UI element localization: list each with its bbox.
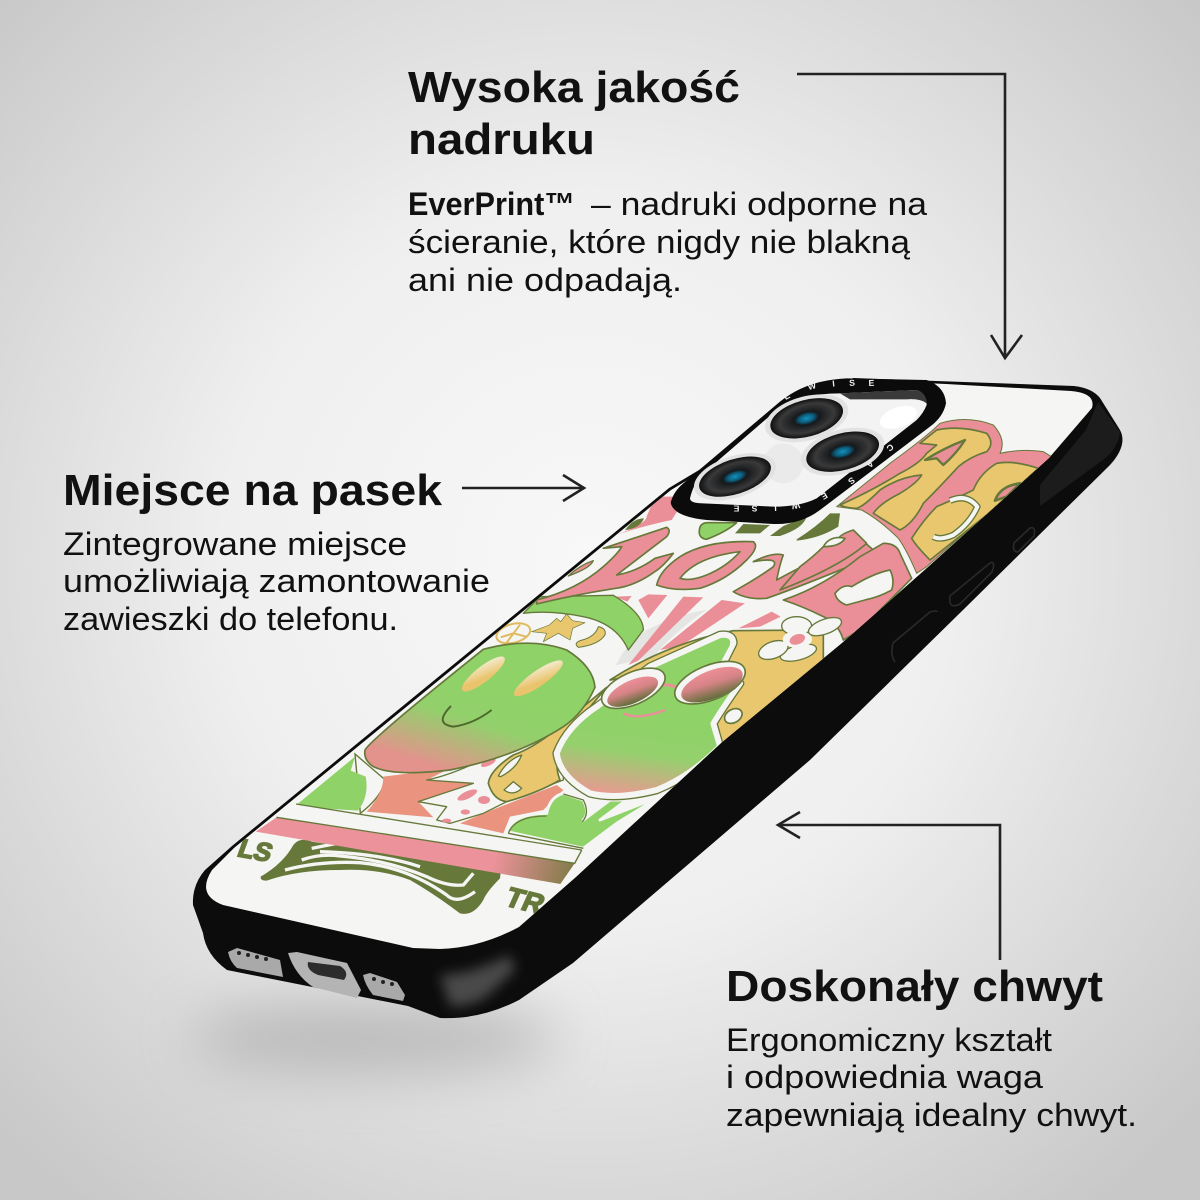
hat green top xyxy=(523,595,643,650)
text: print quality description: – nadruki odporne na xyxy=(591,186,927,222)
print: left green shape xyxy=(294,754,385,813)
text: print quality description: ani nie odpadają. xyxy=(408,262,682,298)
letter L fragment xyxy=(568,561,593,576)
text: strap slot description xyxy=(63,526,490,637)
printed back panel xyxy=(206,383,1093,949)
yellow drip xyxy=(488,687,607,802)
heading: grip: Doskonały chwyt xyxy=(726,962,1103,1011)
ring lettering: E xyxy=(868,378,875,388)
camera ring xyxy=(671,378,946,524)
print: characters xyxy=(365,595,823,848)
ring lettering: E xyxy=(733,503,739,513)
ring lettering: I xyxy=(832,378,835,389)
hat star xyxy=(532,614,585,642)
ring lettering: S xyxy=(849,378,855,388)
ring lettering: A xyxy=(735,419,747,431)
olive accent xyxy=(625,518,644,530)
right smiley xyxy=(557,635,740,796)
E curls xyxy=(835,570,893,605)
print text TR: TR xyxy=(501,881,550,920)
right smiley mouth xyxy=(623,710,665,716)
ring lettering: C xyxy=(884,442,896,454)
phone drop shadow xyxy=(190,1002,560,1074)
camera bump xyxy=(671,378,946,524)
ring lettering: C xyxy=(717,434,729,446)
ring lettering xyxy=(717,378,896,513)
white starburst xyxy=(418,766,564,824)
text: grip description: Ergonomiczny kształt xyxy=(726,1022,1052,1058)
text: strap slot description: Zintegrowane miejsce xyxy=(63,526,407,562)
left glasses lens xyxy=(600,667,666,710)
volume up button xyxy=(950,562,994,606)
print text LS: LS xyxy=(234,833,277,867)
heading: print quality: Wysoka jakość xyxy=(408,63,740,112)
yellow arc xyxy=(610,630,823,753)
ring lettering: E xyxy=(819,490,829,502)
left smiley mouth xyxy=(443,706,492,727)
glasses bridge xyxy=(658,685,677,687)
left smiley eyes xyxy=(462,656,505,692)
volume down button xyxy=(892,611,937,662)
text: strap slot description: umożliwiają zamontowanie xyxy=(63,563,490,599)
charging port xyxy=(288,952,361,998)
window reflection xyxy=(877,401,920,433)
lens right xyxy=(796,419,890,484)
print: word LOV and flower xyxy=(537,497,873,604)
print: rays and gray shadow xyxy=(610,594,781,667)
A counter xyxy=(925,440,965,465)
hat moon xyxy=(576,627,605,647)
print: bottom swirl xyxy=(261,840,501,914)
text: grip description: i odpowiednia waga xyxy=(726,1059,1043,1095)
V curl xyxy=(823,538,845,547)
ring lettering: I xyxy=(774,503,777,513)
ring lettering: W xyxy=(807,380,818,392)
S upper curl xyxy=(995,483,1020,501)
lens top xyxy=(760,386,854,451)
text: print quality description: ścieranie, które nigdy nie blakną xyxy=(408,224,910,260)
pink behind camera xyxy=(618,496,677,535)
yellow letter S xyxy=(912,462,1038,560)
print: band xyxy=(256,804,582,884)
print: flower xyxy=(756,614,844,665)
side buttons xyxy=(892,528,1034,662)
small yellow curl xyxy=(724,708,743,724)
ring lettering: S xyxy=(756,403,767,415)
side glossy highlight xyxy=(1040,402,1120,506)
heading: print quality: nadruku xyxy=(408,115,595,164)
arrow: to strap slot xyxy=(462,475,584,501)
case body xyxy=(193,378,1122,1018)
lower green plant xyxy=(508,792,644,847)
text: grip description: zapewniają idealny chwyt. xyxy=(726,1097,1137,1133)
left speaker grille xyxy=(228,948,283,977)
corner gloss highlight xyxy=(440,955,515,1006)
heading: strap slot: Miejsce na pasek xyxy=(63,466,443,515)
V arm top xyxy=(780,530,867,590)
hat white band xyxy=(610,652,623,666)
text: print quality description xyxy=(408,186,927,298)
ring lettering: A xyxy=(864,458,876,471)
right glasses lens xyxy=(674,660,746,705)
phone case illustration xyxy=(180,370,1122,1018)
letter V xyxy=(733,538,873,599)
callout: grip xyxy=(726,812,1137,1133)
callout: print quality xyxy=(408,63,1022,358)
ring lettering: W xyxy=(790,500,801,511)
letter E xyxy=(783,543,912,640)
arrow: to case side xyxy=(778,812,1000,960)
lens left xyxy=(688,444,782,510)
white back xyxy=(206,383,1093,949)
pink starburst spots xyxy=(442,757,497,823)
window lip xyxy=(840,390,927,403)
AND letters xyxy=(735,513,840,541)
text: grip description xyxy=(726,1022,1137,1133)
callout: strap slot xyxy=(63,466,584,637)
mute switch xyxy=(1014,528,1034,552)
S curl xyxy=(933,498,977,538)
letter L xyxy=(537,527,673,604)
letter O xyxy=(657,542,756,589)
right speaker grille xyxy=(363,973,405,1001)
pink halftone ground xyxy=(367,768,563,833)
green blob xyxy=(699,523,737,539)
heading: print quality xyxy=(408,63,740,164)
arrow: to top of case xyxy=(797,74,1022,358)
text: print quality description: EverPrint™ xyxy=(408,186,575,222)
ring lettering: S xyxy=(751,503,757,513)
pink field xyxy=(837,420,1052,573)
camera window xyxy=(690,390,927,507)
print: word ending and AS xyxy=(780,420,1052,640)
left smiley xyxy=(365,643,595,773)
yellow letter A xyxy=(840,428,991,530)
ring lettering: S xyxy=(846,475,857,487)
hat peace sign xyxy=(495,622,532,644)
ring lettering: E xyxy=(782,390,792,402)
text: strap slot description: zawieszki do telefonu. xyxy=(63,601,398,637)
